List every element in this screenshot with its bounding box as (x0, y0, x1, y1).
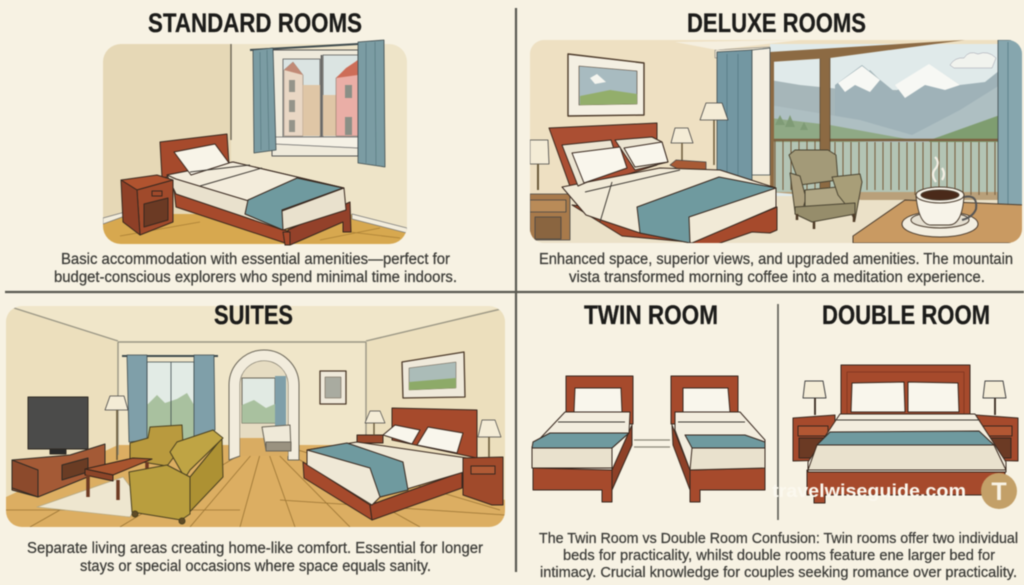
icon: rug (37, 477, 140, 517)
heading: standard rooms: STANDARD ROOMS (148, 8, 362, 38)
icon: coffee table (85, 458, 152, 500)
icon: single bed (160, 134, 351, 245)
watermark: travelwiseguide.com (772, 481, 966, 501)
caption: standard rooms (54, 251, 457, 286)
icon: suite bed (303, 408, 477, 520)
icon: suite nightstand and lamps (365, 411, 503, 505)
icon: window with town view (272, 50, 358, 156)
icon: T badge: T (991, 478, 1007, 506)
heading: twin room: TWIN ROOM (584, 300, 718, 330)
icon: floor curtains (717, 40, 1024, 215)
icon: standing lamp (700, 103, 728, 165)
icon: armchair (789, 150, 862, 229)
icon: wall pictures (320, 352, 465, 404)
caption: twin vs double: intimacy. Crucial knowledge for couples seeking romance over practicality. (540, 564, 1017, 581)
illustration: deluxe room (530, 40, 1024, 250)
icon: twin bed left (532, 376, 633, 502)
caption: suites: Separate living areas creating home-like comfort. Essential for longer (27, 540, 483, 557)
heading: deluxe rooms: DELUXE ROOMS (687, 8, 866, 38)
icon: table with coffee cup (853, 157, 1024, 243)
caption: twin vs double: beds for practicality, whilst double rooms feature ene larger bed for (563, 547, 995, 564)
icon: twin bed right (671, 376, 765, 502)
icon: mountain view window (675, 40, 1022, 200)
heading: double room: DOUBLE ROOM (822, 300, 990, 330)
panel: twin vs double rooms (532, 300, 1018, 581)
heading: suites: SUITES (214, 300, 293, 330)
icon: picture of mountains (568, 54, 644, 116)
icon: archway to bedroom (229, 350, 299, 460)
icon: patio window and curtains (122, 355, 218, 442)
icon: T badge (981, 473, 1017, 509)
watermark (772, 473, 1017, 509)
illustration: standard room (103, 40, 407, 245)
caption: standard rooms: budget-conscious explorers who spend minimal time indoors. (54, 269, 457, 286)
caption: deluxe rooms: vista transformed morning coffee into a meditation experience. (569, 269, 985, 286)
icon: television and stand (12, 397, 105, 497)
illustration: suite (6, 306, 505, 527)
icon: armchair (130, 425, 183, 466)
icon: right nightstand and lamp (976, 381, 1018, 461)
icon: curtains (250, 40, 385, 167)
icon: double bed (793, 365, 1018, 503)
icon: bedside lamps and tables (530, 128, 706, 240)
icon: nightstand (121, 175, 173, 235)
caption: standard rooms: Basic accommodation with essential amenities—perfect for (61, 251, 450, 268)
panel: suites (6, 300, 505, 575)
icon: left nightstand and lamp (793, 381, 835, 461)
icon: floor lamp (105, 396, 128, 460)
caption: twin vs double (539, 530, 1018, 581)
caption: suites: stays or special occasions where space equals sanity. (80, 558, 431, 575)
icon: sofa (129, 430, 223, 524)
panel: standard rooms (54, 8, 457, 286)
panel: deluxe rooms (530, 8, 1024, 286)
caption: deluxe rooms (539, 251, 1013, 286)
icon: double bed (549, 123, 777, 250)
caption: suites (27, 540, 483, 575)
